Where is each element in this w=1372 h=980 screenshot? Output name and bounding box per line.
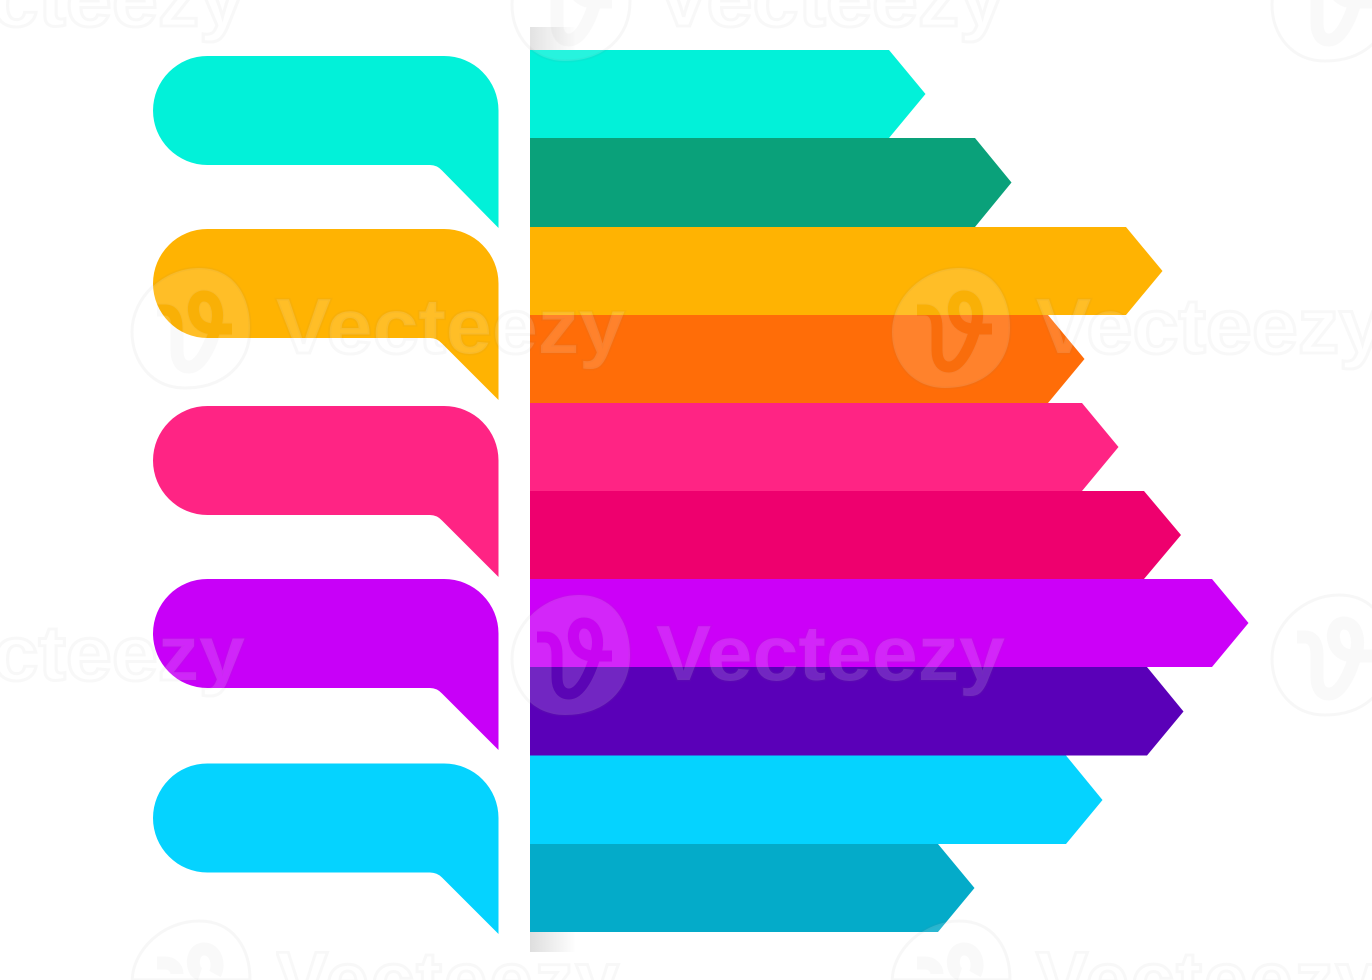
speech bubble: pink [153,406,498,577]
arrow bar 7: magenta [530,579,1248,667]
watermark: bottom row left logo [132,921,250,980]
arrow bar 4: orange [530,315,1084,403]
arrow bar 5: pink [530,403,1118,491]
arrow bar 1: turquoise [530,50,926,138]
watermark: second row right logo [892,268,1010,388]
watermark: third row right logo [1272,595,1372,715]
arrow bar 9: sky blue [530,756,1102,844]
panel: right arrow bars [530,50,1248,932]
panel: left speech bubbles [153,56,498,934]
panel: grey backing strip, top [530,27,576,51]
watermark: second row left text: Vecteezy [276,282,625,370]
watermark: top row centre logo [532,50,605,61]
arrow bar 2: green [530,138,1012,227]
arrow bar 3: amber [530,227,1162,315]
speech bubble: turquoise [153,56,498,228]
arrow bar 10: dark cyan [530,844,974,932]
watermark: second row left logo [153,268,250,338]
speech bubble: amber [153,229,498,400]
arrow bar 6: crimson [530,491,1181,579]
watermark: third row centre text: Vecteezy [656,609,1005,697]
panel: grey backing strip, bottom [530,931,576,952]
speech bubble: magenta [153,579,498,750]
watermark: top row right logo [1272,0,1372,61]
arrow bar 8: indigo [530,667,1184,756]
speech bubble: sky blue [153,764,498,934]
watermark: bottom row right logo [892,921,1010,980]
watermark: third row centre logo [530,595,630,715]
watermark: second row right text: Vecteezy [1036,282,1372,370]
